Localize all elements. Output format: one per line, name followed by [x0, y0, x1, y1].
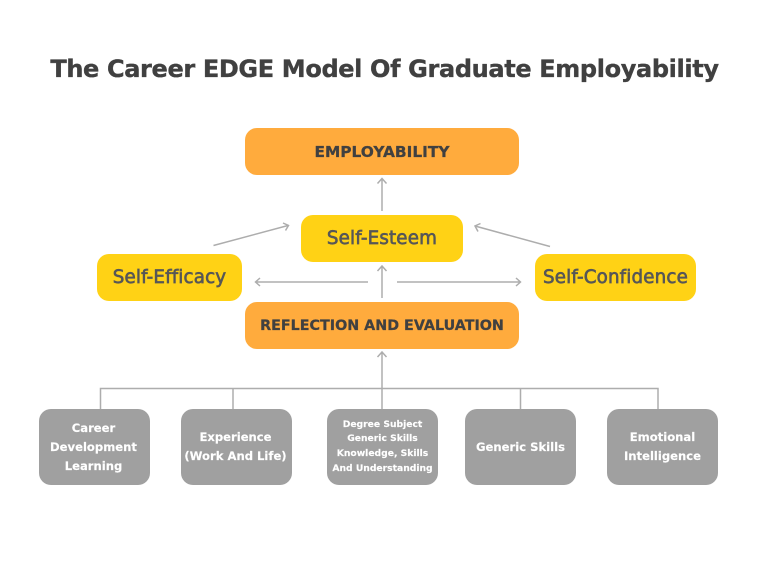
- box: self-esteem: Self-Esteem: [327, 228, 437, 249]
- box: self-esteem: [301, 215, 463, 262]
- box: self-efficacy: Self-Efficacy: [113, 267, 226, 288]
- box: degree subject: [327, 409, 438, 485]
- box: self-confidence: Self-Confidence: [543, 267, 688, 288]
- box: career development learning: Development: [50, 440, 137, 454]
- box: career development learning: Learning: [65, 458, 122, 472]
- box: generic skills: Generic Skills: [476, 440, 565, 454]
- box: generic skills: [465, 409, 576, 485]
- box: degree subject: Generic Skills: [347, 433, 418, 444]
- box: employability: [245, 128, 519, 175]
- box: experience: [181, 409, 292, 485]
- box: degree subject: Degree Subject: [343, 419, 422, 430]
- box: degree subject: Knowledge, Skills: [337, 448, 428, 459]
- box: self-confidence: [535, 254, 696, 301]
- box: degree subject: And Understanding: [332, 463, 433, 474]
- box: emotional intelligence: Intelligence: [624, 449, 701, 463]
- box: experience: (Work And Life): [184, 449, 287, 463]
- box: experience: Experience: [199, 430, 272, 444]
- box: reflection and evaluation: REFLECTION AND EVALUATION: [260, 318, 504, 334]
- box: career development learning: [39, 409, 150, 485]
- box: emotional intelligence: [607, 409, 718, 485]
- box: career development learning: Career: [72, 420, 115, 434]
- box: reflection and evaluation: [245, 302, 519, 349]
- box: emotional intelligence: Emotional: [630, 430, 695, 444]
- title: The Career EDGE Model Of Graduate Employability: [50, 54, 719, 82]
- box: employability: EMPLOYABILITY: [314, 142, 450, 160]
- box: self-efficacy: [97, 254, 242, 301]
